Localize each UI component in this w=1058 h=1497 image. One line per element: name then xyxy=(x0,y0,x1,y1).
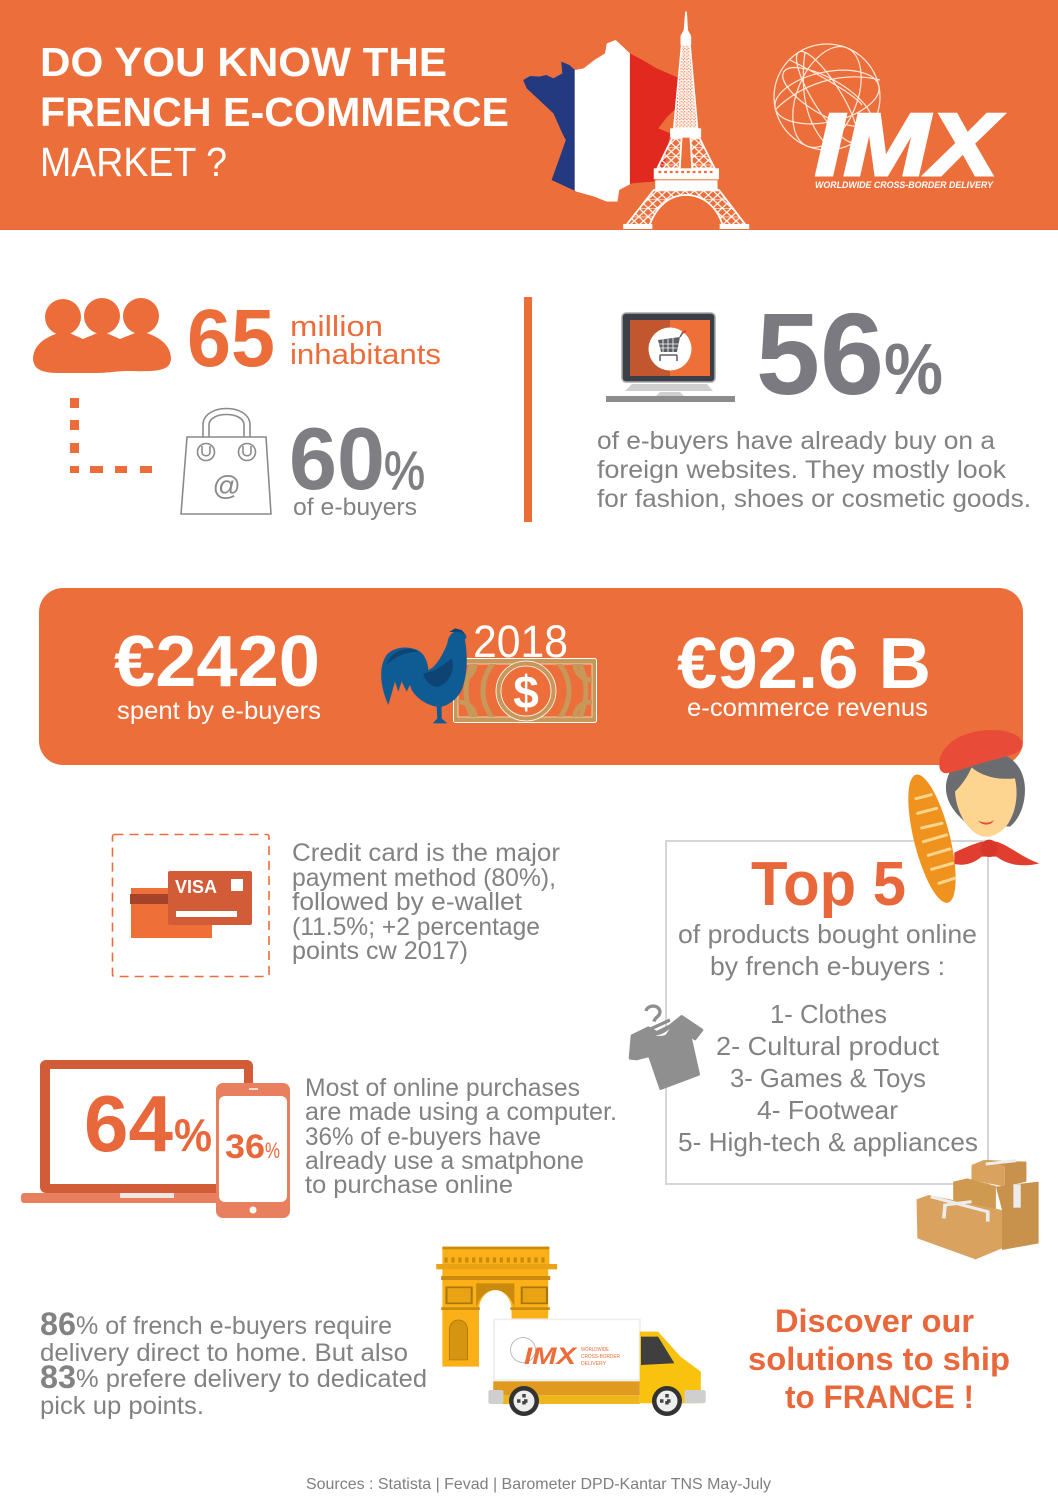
list: products: 1- Clothes xyxy=(770,999,887,1029)
icon: rooster xyxy=(381,628,467,723)
icon: France flag map xyxy=(523,40,680,202)
stat: 36 percent: 36 xyxy=(225,1128,265,1166)
panel: devices xyxy=(21,1060,617,1218)
text: foreign websites: foreign websites. They mostly look xyxy=(597,456,1007,484)
text: payment xyxy=(292,839,560,965)
stat: 65 million: million xyxy=(290,311,383,343)
icon: t-shirt on hanger xyxy=(630,1006,702,1089)
logo: IMX wordmark: IMX xyxy=(815,95,1004,194)
stat: 64 percent xyxy=(84,1079,212,1168)
callout: discover xyxy=(748,1303,1010,1415)
panel: spending band xyxy=(39,588,1023,765)
icon: delivery truck: WORLDWIDE xyxy=(581,1347,610,1353)
icon: people xyxy=(33,298,171,373)
title xyxy=(40,39,509,185)
text: devices: 36% of e-buyers have xyxy=(305,1123,541,1151)
text: devices xyxy=(305,1074,617,1199)
title: FRENCH E-COMMERCE xyxy=(40,89,509,135)
stat: 65 million: 65 xyxy=(187,293,275,384)
divider bar xyxy=(524,297,532,522)
stat: 2420 euros: spent by e-buyers xyxy=(117,697,321,725)
text: sources: Sources : Statista | Fevad | Barometer DPD-Kantar TNS May-July xyxy=(306,1476,771,1493)
text: payment: (11.5%; +2 percentage xyxy=(292,913,540,941)
title: MARKET ? xyxy=(40,139,227,185)
stat: 56 percent: 56 xyxy=(756,289,884,419)
icon: scarf xyxy=(954,840,1039,865)
text: subtitle: by french e-buyers : xyxy=(710,951,945,981)
text: delivery stats: 83 xyxy=(40,1359,76,1395)
stat: 36 percent: % xyxy=(265,1138,280,1163)
panel: delivery xyxy=(40,1247,1010,1420)
stat: 65 million xyxy=(187,293,441,384)
text: devices: Most of online purchases xyxy=(305,1074,580,1102)
stat: 64 percent: % xyxy=(174,1109,212,1161)
icon: baguette xyxy=(899,770,965,907)
text: payment: points cw 2017) xyxy=(292,937,468,965)
text: delivery stats: pick up points. xyxy=(40,1392,204,1420)
text: devices: already use a smatphone xyxy=(305,1147,584,1175)
panel: foreign websites xyxy=(597,289,1031,513)
text: delivery stats: 86 xyxy=(40,1306,76,1342)
text: payment: payment method (80%), xyxy=(292,864,556,892)
text: delivery stats xyxy=(40,1306,427,1420)
logo: IMX wordmark: WORLDWIDE CROSS-BORDER DELIVERY xyxy=(815,180,994,190)
icon: delivery truck: CROSS-BORDER xyxy=(581,1354,620,1360)
header band xyxy=(0,0,1058,230)
text: devices: are made using a computer. xyxy=(305,1098,617,1126)
icon: shopping bag: @ xyxy=(212,470,240,501)
icon: Eiffel tower xyxy=(623,12,749,229)
icon: shopping bag xyxy=(181,408,271,514)
text: payment: followed by e-wallet xyxy=(292,888,522,916)
icon: laptop xyxy=(21,1060,253,1203)
icon: banknote xyxy=(453,658,597,723)
icon: delivery truck: DELIVERY xyxy=(581,1361,607,1367)
text: delivery stats: % of french e-buyers require xyxy=(76,1312,392,1340)
callout: discover: Discover our xyxy=(775,1303,974,1339)
stat: 60 percent: % xyxy=(384,441,425,501)
stat: 92.6 billion: €92.6 B xyxy=(677,624,931,704)
panel: top 5 products xyxy=(630,841,988,1184)
text: subtitle: of products bought online xyxy=(678,919,977,949)
list: products: 5- High-tech & appliances xyxy=(678,1127,978,1157)
text: 2018: 2018 xyxy=(473,616,568,667)
text: subtitle xyxy=(678,919,977,981)
panel: population xyxy=(33,293,441,521)
icon: cardboard boxes xyxy=(917,1160,1039,1259)
icon: banknote: $ xyxy=(513,666,539,718)
stat: 56 percent: % xyxy=(884,330,943,410)
list: products xyxy=(678,999,978,1157)
text: payment: Credit card is the major xyxy=(292,839,560,867)
logo: IMX globe xyxy=(770,37,884,157)
stat: 60 percent: of e-buyers xyxy=(293,494,417,521)
panel: payment xyxy=(112,834,560,976)
icon: credit cards xyxy=(112,834,269,976)
icon: credit cards: VISA xyxy=(175,877,217,897)
stat: 2420 euros: €2420 xyxy=(114,622,320,702)
stat: 60 percent: 60 xyxy=(289,409,385,508)
text: delivery stats: delivery direct to home. But also xyxy=(40,1339,408,1367)
icon: delivery truck: IMX xyxy=(524,1343,578,1370)
text: foreign websites: for fashion, shoes or cosmetic goods. xyxy=(597,485,1031,513)
stat: 92.6 billion: e-commerce revenus xyxy=(687,694,928,722)
text: devices: to purchase online xyxy=(305,1171,513,1199)
stat: 65 million: inhabitants xyxy=(290,339,441,371)
icon: laptop with cart xyxy=(606,313,735,402)
icon: smartphone xyxy=(216,1083,290,1218)
text: foreign websites: of e-buyers have already buy on a xyxy=(597,427,995,455)
illustration: baker with baguette xyxy=(899,730,1039,907)
arrow: dashed connector xyxy=(70,398,152,473)
stat: 36 percent xyxy=(225,1128,280,1166)
list: products: 2- Cultural product xyxy=(716,1031,940,1061)
icon: Arc de Triomphe xyxy=(436,1247,557,1367)
icon: delivery truck xyxy=(488,1319,706,1416)
stat: 56 percent xyxy=(756,289,943,419)
callout: discover: solutions to ship xyxy=(748,1341,1010,1377)
stat: 64 percent: 64 xyxy=(84,1079,174,1168)
icon: face and beret xyxy=(939,730,1025,837)
stat: 60 percent xyxy=(289,409,425,521)
text: delivery stats: % prefere delivery to dedicated xyxy=(76,1365,427,1393)
list: products: 3- Games & Toys xyxy=(730,1063,926,1093)
list: products: 4- Footwear xyxy=(757,1095,898,1125)
title: DO YOU KNOW THE xyxy=(40,39,447,85)
heading: top 5: Top 5 xyxy=(751,850,906,919)
text: foreign websites xyxy=(597,427,1031,513)
callout: discover: to FRANCE ! xyxy=(785,1379,974,1415)
